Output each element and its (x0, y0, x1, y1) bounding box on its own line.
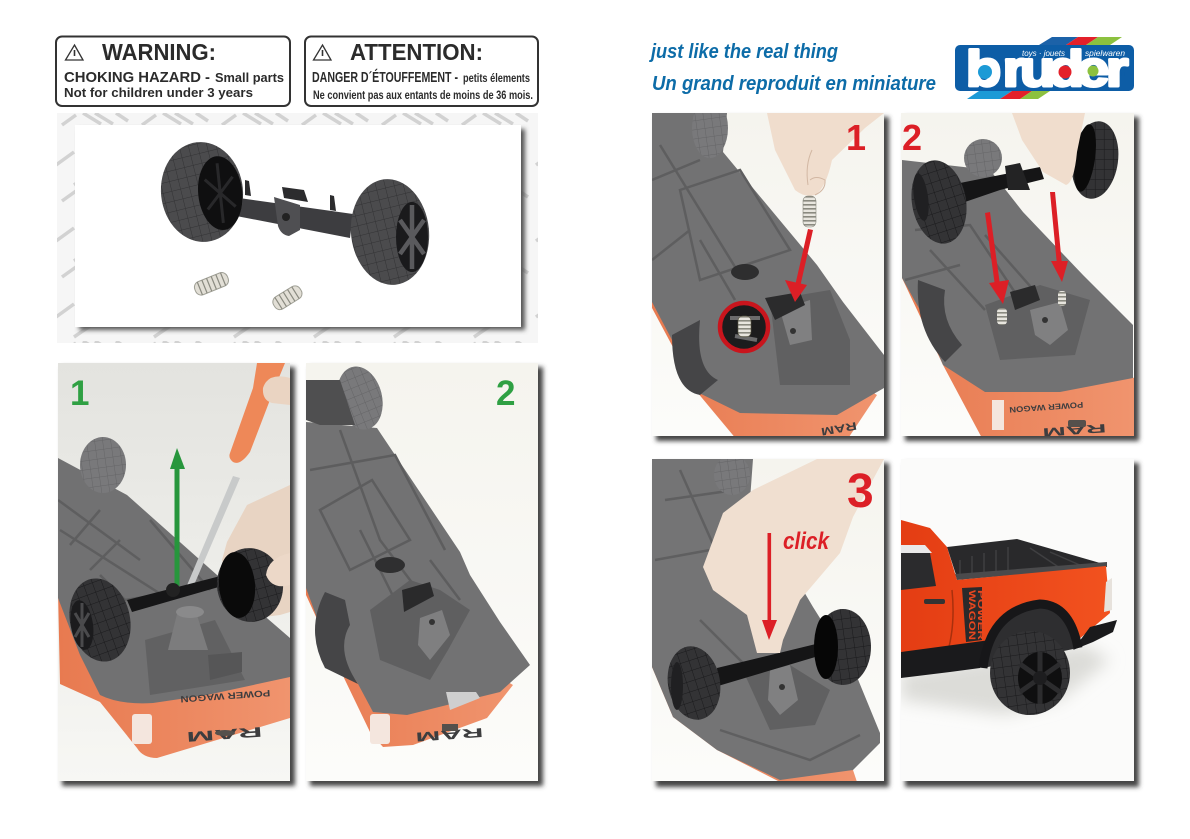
wheel: rear grey (964, 139, 1002, 177)
icon: attention triangle (314, 45, 331, 60)
tagline: Un grand reproduit en miniature (652, 73, 936, 95)
spring: left (193, 271, 230, 297)
panel: parts overview (57, 113, 538, 343)
tagline (648, 41, 936, 95)
axle (960, 167, 1044, 203)
tailgate text (181, 690, 270, 742)
fingers on wheel (266, 560, 284, 586)
icon: red arrow (785, 229, 813, 302)
click label: click (783, 528, 830, 555)
wheel arch (672, 320, 718, 395)
panel: removal step 2 (306, 362, 543, 786)
axle (717, 643, 822, 686)
icon: red arrow right (1050, 192, 1068, 282)
warning label: CHOKING HAZARD - (64, 69, 210, 86)
screwdriver (185, 363, 285, 592)
spring: right (271, 284, 304, 312)
warning label (56, 36, 290, 106)
tailgate text: RAM (820, 419, 858, 437)
tailgate text (1009, 400, 1107, 439)
wheel: right (346, 175, 434, 289)
truck body: orange (652, 620, 857, 782)
panel: removal step 1 (58, 363, 295, 786)
spring (803, 196, 816, 227)
wheel: right (815, 609, 871, 685)
truck underside (306, 422, 530, 715)
tailgate text: RAM (415, 725, 484, 745)
tailgate text: RAM (186, 724, 263, 745)
hand (1012, 113, 1085, 185)
wheel: left (69, 578, 131, 662)
inset circle (720, 303, 768, 351)
truck underside (58, 458, 290, 703)
tailgate text: RAM (1042, 421, 1107, 439)
icon: green arrow up (170, 448, 185, 586)
icon: red arrow left (985, 212, 1009, 304)
finger on screwdriver (263, 376, 290, 405)
truck side (901, 520, 1110, 652)
wheel: left (662, 642, 726, 724)
icon: warning triangle (66, 45, 83, 60)
lower body black (901, 640, 990, 678)
wheel arch (983, 604, 1078, 668)
panel: install step 1 (652, 98, 889, 441)
truck underside (652, 459, 880, 780)
truck body: orange (58, 590, 290, 758)
wheel: rear grey (339, 366, 383, 429)
power wagon decal: WAGON (967, 590, 977, 640)
power wagon decal: POWER (976, 590, 986, 641)
wheel (990, 631, 1070, 715)
axle (127, 576, 218, 612)
attention label: DANGER D´ÉTOUFFEMENT - (312, 69, 458, 86)
truck underside (902, 160, 1133, 392)
hand lower (222, 485, 290, 620)
springs (997, 291, 1066, 325)
wheel arch (918, 280, 962, 362)
wheel: rear grey (714, 455, 750, 495)
truck body: orange (902, 278, 1134, 436)
tailgate text: POWER WAGON (180, 688, 271, 704)
truck body: orange (652, 302, 877, 436)
number 3: 3 (847, 465, 874, 518)
wheel: right (1072, 121, 1118, 199)
window (901, 553, 936, 590)
tail light (1104, 578, 1112, 612)
wheel: rear grey (80, 437, 126, 493)
warning label: Not for children under 3 years (64, 85, 253, 100)
panel: finished truck (901, 459, 1139, 787)
number 2: 2 (496, 374, 515, 413)
wheel: rear grey (694, 113, 728, 156)
attention label: ATTENTION: (350, 39, 483, 65)
axle (225, 180, 353, 238)
tailgate text: POWER WAGON (1009, 400, 1083, 414)
warning label: WARNING: (102, 39, 216, 65)
hand (767, 113, 884, 196)
wheel: left (912, 160, 966, 244)
wheel: right (217, 548, 284, 622)
panel: install step 3 (652, 455, 889, 787)
logo: bruder: toys · jouets (1022, 49, 1065, 58)
wheel arch (315, 592, 358, 684)
warning label: Small parts (215, 70, 284, 85)
hand (703, 459, 884, 653)
attention label: petits élements (463, 71, 530, 85)
panel: install step 2 (901, 113, 1139, 441)
wheel: left (156, 138, 248, 246)
logo: bruder: spielwaren (1085, 49, 1126, 58)
attention label: Ne convient pas aux entants de moins de 36 mois. (313, 88, 533, 102)
tagline: just like the real thing (648, 41, 838, 63)
power wagon decal (962, 587, 986, 642)
truck underside (652, 113, 884, 415)
attention label (305, 36, 538, 106)
logo: bruder: bruder (966, 41, 1128, 97)
number 1: 1 (70, 374, 89, 413)
truck body: orange (306, 588, 513, 747)
number 1: 1 (846, 117, 866, 158)
door handle (924, 599, 945, 604)
ground shadow (901, 645, 1110, 715)
bed interior (947, 539, 1107, 578)
number 2: 2 (902, 117, 922, 158)
icon: red arrow down (762, 533, 777, 640)
